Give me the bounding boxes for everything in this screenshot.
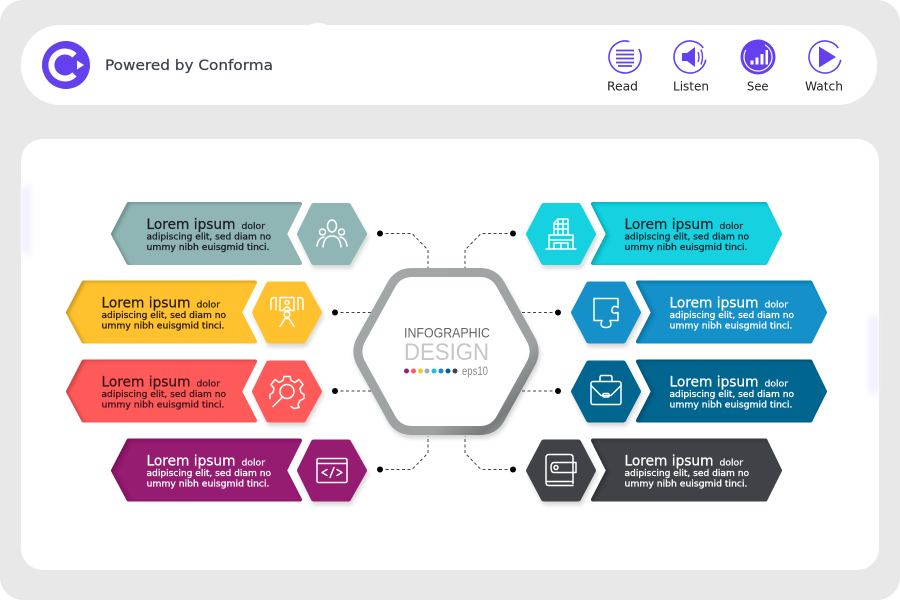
brand text: Powered by Conforma [105,58,273,74]
text: adipiscing elit, sed diam no [624,232,749,242]
text: dolor [764,380,788,390]
icon: presenter [271,298,303,326]
item: right 4 charcoal [528,440,780,500]
text: Lorem ipsum [146,454,236,470]
text: adipiscing elit, sed diam no [146,232,271,242]
icon: wallet [546,454,576,486]
center title: INFOGRAPHIC [404,324,490,340]
logo: Conforma [42,41,90,89]
icon: watch: Watch [805,80,843,94]
text: adipiscing elit, sed diam no [102,311,226,321]
text: Lorem ipsum [624,454,714,470]
icon: watch [805,38,844,94]
icon: building [546,219,576,249]
text: ummy nibh euisgmid tinci. [670,400,792,410]
icon: gear and magnifier [270,376,304,408]
item: right 3 navy [574,362,825,420]
connector lines [332,230,561,472]
text: adipiscing elit, sed diam no [670,390,794,400]
main panel [21,139,879,570]
text [624,217,749,253]
item: right 1 cyan [528,204,780,263]
item: left 1 teal [113,204,364,263]
header bar [21,23,877,105]
text: adipiscing elit, sed diam no [146,469,271,479]
text: Lorem ipsum [102,374,190,390]
text: dolor [720,458,743,468]
text: dolor [242,458,265,468]
center subtitle: DESIGN [404,339,489,366]
icon: listen [671,38,709,94]
icon: code window [317,458,347,482]
text [670,296,794,332]
text: adipiscing elit, sed diam no [102,390,226,400]
text: dolor [764,300,788,310]
item: left 2 yellow [68,282,320,342]
text: dolor [196,380,220,390]
text: dolor [196,300,220,310]
icon: read: Read [607,80,638,94]
text: adipiscing elit, sed diam no [624,469,749,479]
text: Lorem ipsum [670,296,758,312]
icon: puzzle piece [594,298,618,328]
icon: listen: Listen [673,80,709,94]
text [102,374,226,410]
text: Lorem ipsum [624,217,714,233]
text [102,296,226,332]
text: ummy nibh euisgmid tinci. [102,400,224,410]
text: ummy nibh euisgmid tinci. [624,480,748,490]
icon: read [603,35,647,94]
text: Lorem ipsum [146,217,236,233]
text: dolor [242,222,265,232]
text: Lorem ipsum [102,296,190,312]
text [146,454,271,490]
text: Lorem ipsum [670,374,758,390]
text [670,374,794,410]
text: adipiscing elit, sed diam no [670,311,794,321]
item: left 4 purple [113,440,364,500]
text: ummy nibh euisgmid tinci. [146,243,270,253]
text [146,217,271,253]
icon: people [317,220,347,247]
text: ummy nibh euisgmid tinci. [670,322,792,332]
icon: see [739,38,777,94]
text: dolor [720,222,743,232]
text: ummy nibh euisgmid tinci. [102,322,224,332]
text [624,454,749,490]
eps label: eps10 [462,366,488,378]
text: ummy nibh euisgmid tinci. [146,480,270,490]
icon: briefcase [591,376,621,404]
icon: see: See [747,80,768,94]
colour dots [404,368,458,374]
item: left 3 red [68,362,320,420]
central hexagon [358,272,534,430]
text: ummy nibh euisgmid tinci. [624,243,748,253]
item: right 2 blue [574,282,825,342]
